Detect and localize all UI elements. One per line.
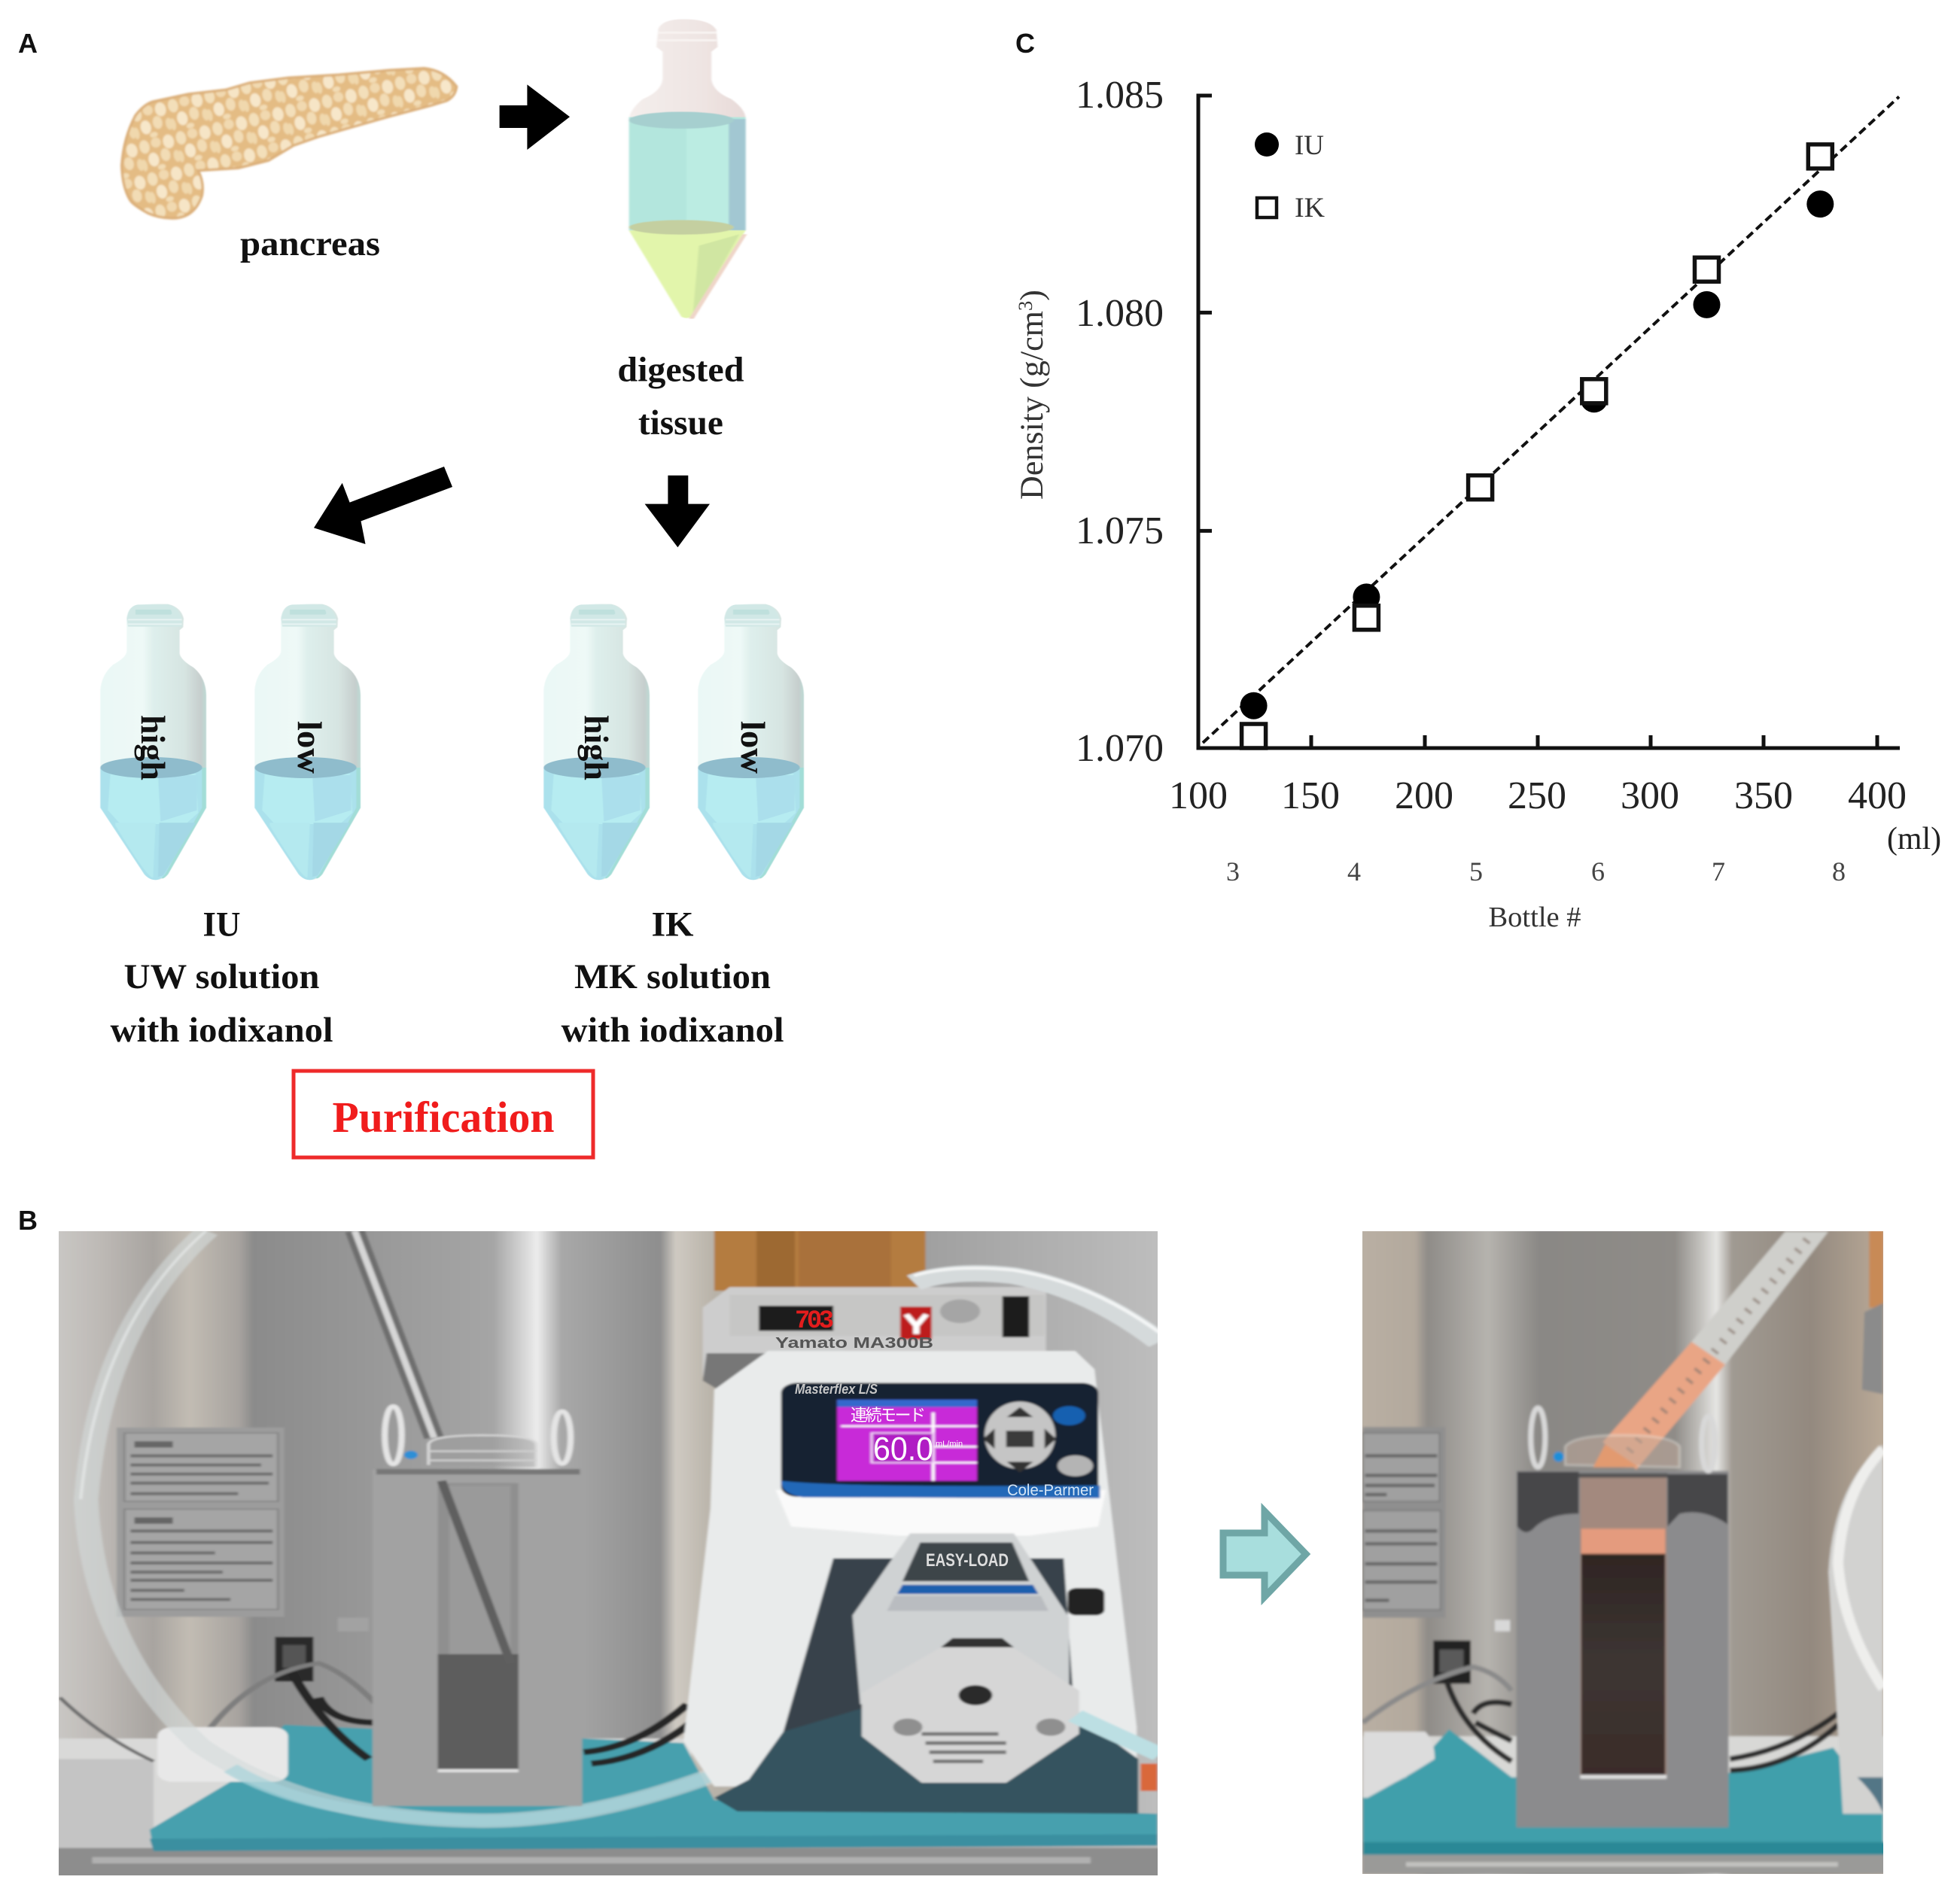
plate: [1362, 1427, 1445, 1618]
callout: Purification: Purification: [333, 1093, 554, 1142]
label: IK solution: IK: [652, 905, 694, 944]
x axis tick labels: 200: [1395, 774, 1453, 817]
panel B: purification photographs: [18, 1205, 1886, 1878]
bottle numbers: 3: [1226, 856, 1240, 887]
panel letter A: A: [18, 28, 38, 59]
icon: digested tissue bottle: [629, 20, 747, 318]
panel C: density chart: [1015, 28, 1941, 933]
screen and device text: Cole-Parmer: [1007, 1482, 1094, 1499]
bottle: IU high: [100, 604, 206, 880]
legend: IK: [1295, 193, 1325, 224]
axes: [1198, 96, 1900, 748]
stirrer: [702, 1285, 1047, 1375]
label: high: high: [134, 715, 172, 780]
legend: [1255, 130, 1325, 224]
bottle: IK low: [698, 604, 804, 880]
bottle numbers: 6: [1591, 856, 1605, 887]
tubing on pump: [1828, 1444, 1883, 1814]
y axis tick labels: [1076, 74, 1164, 770]
series IK: squares: [1242, 144, 1832, 748]
screen and device text: mL/min: [936, 1440, 963, 1449]
label: low: low: [734, 721, 772, 774]
bottles: IU high and low: [100, 604, 361, 880]
label: IK solution: [562, 905, 784, 1050]
icon: pancreas: [122, 68, 457, 218]
peristaltic head: [853, 1533, 1069, 1705]
pipette: [1691, 1231, 1828, 1364]
y axis title: 3: [1015, 301, 1036, 311]
rings and jar mouth: [1531, 1408, 1545, 1468]
label: high: high: [577, 715, 615, 780]
y axis tick labels: 1.085: [1076, 74, 1164, 117]
callout: Purification: [294, 1071, 593, 1157]
y axis tick labels: 1.080: [1076, 292, 1164, 335]
label: IU solution: IU: [203, 905, 241, 944]
x axis tick labels: 250: [1508, 774, 1566, 817]
screen and device text: EASY-LOAD: [926, 1550, 1009, 1571]
photo: jar after purification: [1360, 1229, 1886, 1877]
y axis tick labels: 1.075: [1076, 509, 1164, 552]
x axis tick labels: 400: [1848, 774, 1907, 817]
label: digested tissue: digested: [617, 350, 744, 389]
holder: [1517, 1471, 1728, 1827]
arrow: toward IK: [645, 476, 710, 547]
y axis title: ): [1015, 290, 1050, 301]
label: IK solution: with iodixanol: [562, 1011, 784, 1050]
screen and device text: 60.0: [873, 1431, 933, 1468]
bottle: IK high: [543, 604, 650, 880]
screen and device text: [775, 1307, 1094, 1571]
screen and device text: Yamato MA300B: [775, 1335, 933, 1352]
label: IU solution: [110, 905, 333, 1050]
bottle: IU low: [254, 604, 361, 880]
label: low: low: [291, 721, 328, 774]
y axis title: Density (g/cm: [1015, 315, 1050, 500]
screen and device text: 連続モード: [851, 1406, 926, 1425]
bottle numbers: 7: [1712, 856, 1725, 887]
label: IU solution: UW solution: [123, 957, 319, 996]
bottles: IK high and low: [543, 604, 804, 880]
panel letter B: B: [18, 1205, 38, 1236]
legend: IU: [1295, 130, 1324, 161]
bottle numbers: 5: [1469, 856, 1483, 887]
bottle numbers: 8: [1832, 856, 1846, 887]
socket and cables: [1433, 1641, 1471, 1683]
arrow: toward IU: [314, 467, 452, 544]
y axis tick labels: 1.070: [1076, 727, 1164, 770]
series IU: circles: [1240, 190, 1834, 719]
label: pancreas: pancreas: [240, 224, 380, 263]
x axis tick labels: 100: [1169, 774, 1228, 817]
arrow: pancreas to digested tissue: [500, 84, 570, 150]
bottle numbers: [1226, 856, 1846, 887]
x axis unit: (ml): [1887, 822, 1941, 856]
steel holder with jar: [373, 1470, 582, 1806]
label: digested tissue: tissue: [638, 403, 723, 443]
screen and device text: Masterflex L/S: [795, 1382, 878, 1397]
screen and device text: 703: [795, 1307, 834, 1336]
label: digested tissue: [617, 350, 744, 443]
panel letter C: C: [1015, 28, 1035, 59]
panel A: sample preparation workflow: [18, 20, 804, 1157]
x axis tick labels: 300: [1621, 774, 1679, 817]
label: IU solution: with iodixanol: [110, 1011, 333, 1050]
label: IK solution: MK solution: [574, 957, 771, 996]
x axis title: Bottle #: Bottle #: [1489, 902, 1581, 933]
arrow: before to after: [1223, 1511, 1306, 1597]
x axis tick labels: 150: [1281, 774, 1340, 817]
trend line: [1203, 96, 1899, 743]
bottle numbers: 4: [1347, 856, 1361, 887]
pump body: [683, 1351, 1137, 1787]
x axis tick labels: 350: [1734, 774, 1793, 817]
photo: pump set-up before purification: [53, 1228, 1164, 1878]
x axis tick labels: [1169, 774, 1907, 817]
